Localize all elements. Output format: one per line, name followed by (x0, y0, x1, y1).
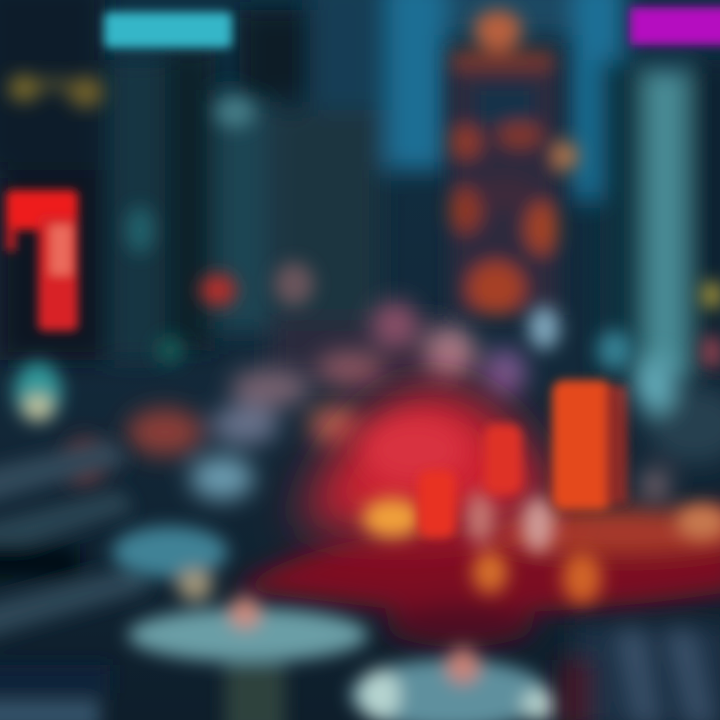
street: left foreground stripes (0, 440, 150, 720)
street: right foreground stripes (560, 625, 720, 720)
tower: red-orange high rise (449, 10, 578, 315)
crowd: midground figures (67, 301, 527, 500)
table: teal foreground table (112, 526, 368, 720)
cylinders: glowing red-orange columns (418, 380, 628, 538)
sign: small red lamp (200, 262, 314, 306)
sign: cyan billboard (104, 12, 232, 48)
sign: magenta billboard (630, 7, 720, 45)
platform: red circular stage (235, 505, 720, 647)
sign: yellow lights (8, 74, 104, 108)
street: right side dark dome and pale reflection (635, 357, 720, 501)
glow: central red burst (300, 385, 555, 534)
glow: hot core (363, 416, 467, 484)
light: teal street lamp (14, 362, 62, 422)
sign: pale window highlights (126, 96, 720, 370)
sign: red neon (6, 190, 78, 331)
buildings: background towers (0, 0, 720, 380)
platform: glowing rim (362, 492, 720, 604)
table: pale foreground table (350, 647, 558, 720)
